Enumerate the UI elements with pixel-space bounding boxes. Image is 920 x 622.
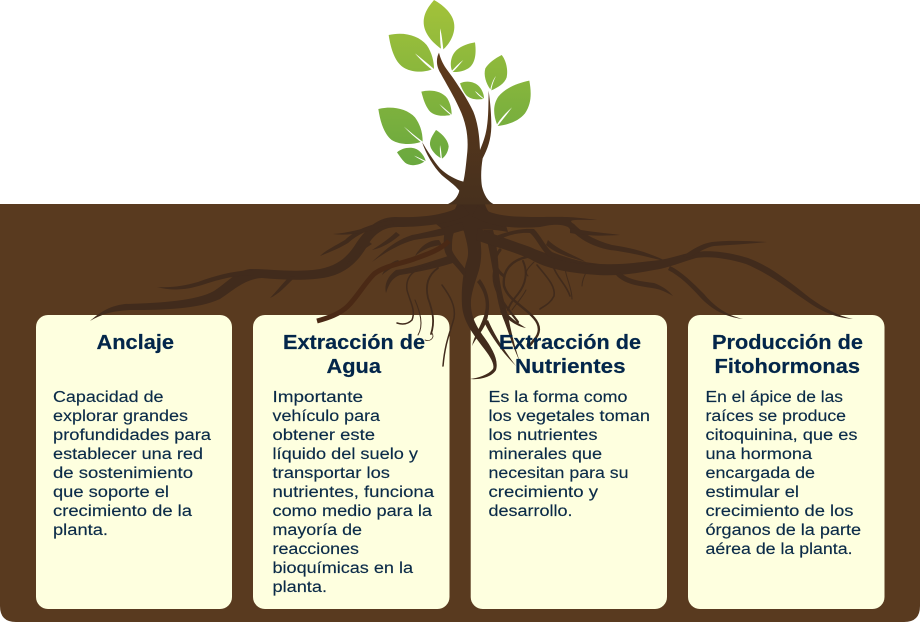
body text: una hormona: [706, 446, 812, 463]
heading: Fitohormonas: [714, 356, 860, 378]
body text: Importante: [272, 389, 363, 406]
heading: Extracción de: [499, 332, 641, 354]
reddish main root: [317, 241, 449, 321]
panel: Extracción de Nutrientes card background: [471, 315, 667, 609]
body text: raíces se produce: [706, 408, 846, 425]
trunk and branches: [422, 53, 494, 204]
body text: órganos de la parte: [706, 522, 861, 539]
body text: vehículo para: [272, 408, 380, 425]
plant: [378, 0, 531, 204]
body text: encargada de: [706, 465, 815, 482]
right upper root: [472, 205, 668, 262]
body text: profundidades para: [53, 427, 211, 444]
card text: Producción de Fitohormonas: [706, 332, 863, 558]
body text: aérea de la planta.: [706, 541, 852, 558]
left curly rootlets: [397, 250, 588, 366]
card text: Anclaje: [53, 332, 211, 539]
centre-right branch: [484, 230, 520, 362]
tap root: [462, 228, 497, 379]
body text: planta.: [272, 579, 327, 596]
body text: minerales que: [488, 446, 602, 463]
panel: Producción de Fitohormonas card background: [688, 315, 884, 609]
body text: [488, 389, 650, 520]
body text: crecimiento de la: [53, 503, 192, 520]
body text: mayoría de: [272, 522, 362, 539]
body text: establecer una red: [53, 446, 203, 463]
body text: reacciones: [272, 541, 359, 558]
body text: En el ápice de las: [706, 389, 843, 406]
left long root: [90, 205, 470, 321]
body text: líquido del suelo y: [272, 446, 418, 463]
leaf: [378, 0, 531, 165]
heading: Agua: [326, 356, 382, 378]
heading: [499, 332, 641, 378]
body text: desarrollo.: [488, 503, 572, 520]
card text: Extracción de Agua: [272, 332, 434, 596]
panel: Anclaje card background: [36, 315, 232, 609]
body text: crecimiento de los: [706, 503, 854, 520]
body text: nutrientes, funciona: [272, 484, 434, 501]
body text: de sostenimiento: [53, 465, 193, 482]
body text: explorar grandes: [53, 408, 188, 425]
panel: Extracción de Agua card background: [253, 315, 450, 609]
body text: estimular el: [706, 484, 799, 501]
card text: Extracción de Nutrientes: [488, 332, 650, 520]
body text: transportar los: [272, 465, 390, 482]
body text: Es la forma como: [488, 389, 628, 406]
body text: necesitan para su: [488, 465, 628, 482]
root system: [90, 200, 853, 379]
body text: los nutrientes: [488, 427, 598, 444]
body text: [53, 389, 211, 539]
body text: citoquinina, que es: [706, 427, 858, 444]
right main root: [476, 228, 853, 319]
centre root branches: [472, 279, 489, 346]
left branches: [157, 270, 254, 289]
root crown: [436, 200, 508, 232]
body text: bioquímicas en la: [272, 560, 413, 577]
body text: como medio para la: [272, 503, 432, 520]
soil background: [0, 204, 920, 622]
right curly rootlets: [504, 257, 539, 347]
right branches: [683, 241, 767, 258]
heading: Nutrientes: [515, 356, 626, 378]
body text: [272, 389, 434, 596]
body text: crecimiento y: [488, 484, 598, 501]
body text: planta.: [53, 522, 108, 539]
body text: los vegetales toman: [488, 408, 650, 425]
heading: [712, 332, 863, 378]
heading: [283, 332, 425, 378]
heading: Extracción de: [283, 332, 425, 354]
centre-left branch: [444, 230, 466, 278]
body text: Capacidad de: [53, 389, 164, 406]
body text: que soporte el: [53, 484, 169, 501]
body text: [706, 389, 861, 558]
heading: Producción de: [712, 332, 863, 354]
body text: obtener este: [272, 427, 375, 444]
heading: Anclaje: [96, 332, 174, 354]
